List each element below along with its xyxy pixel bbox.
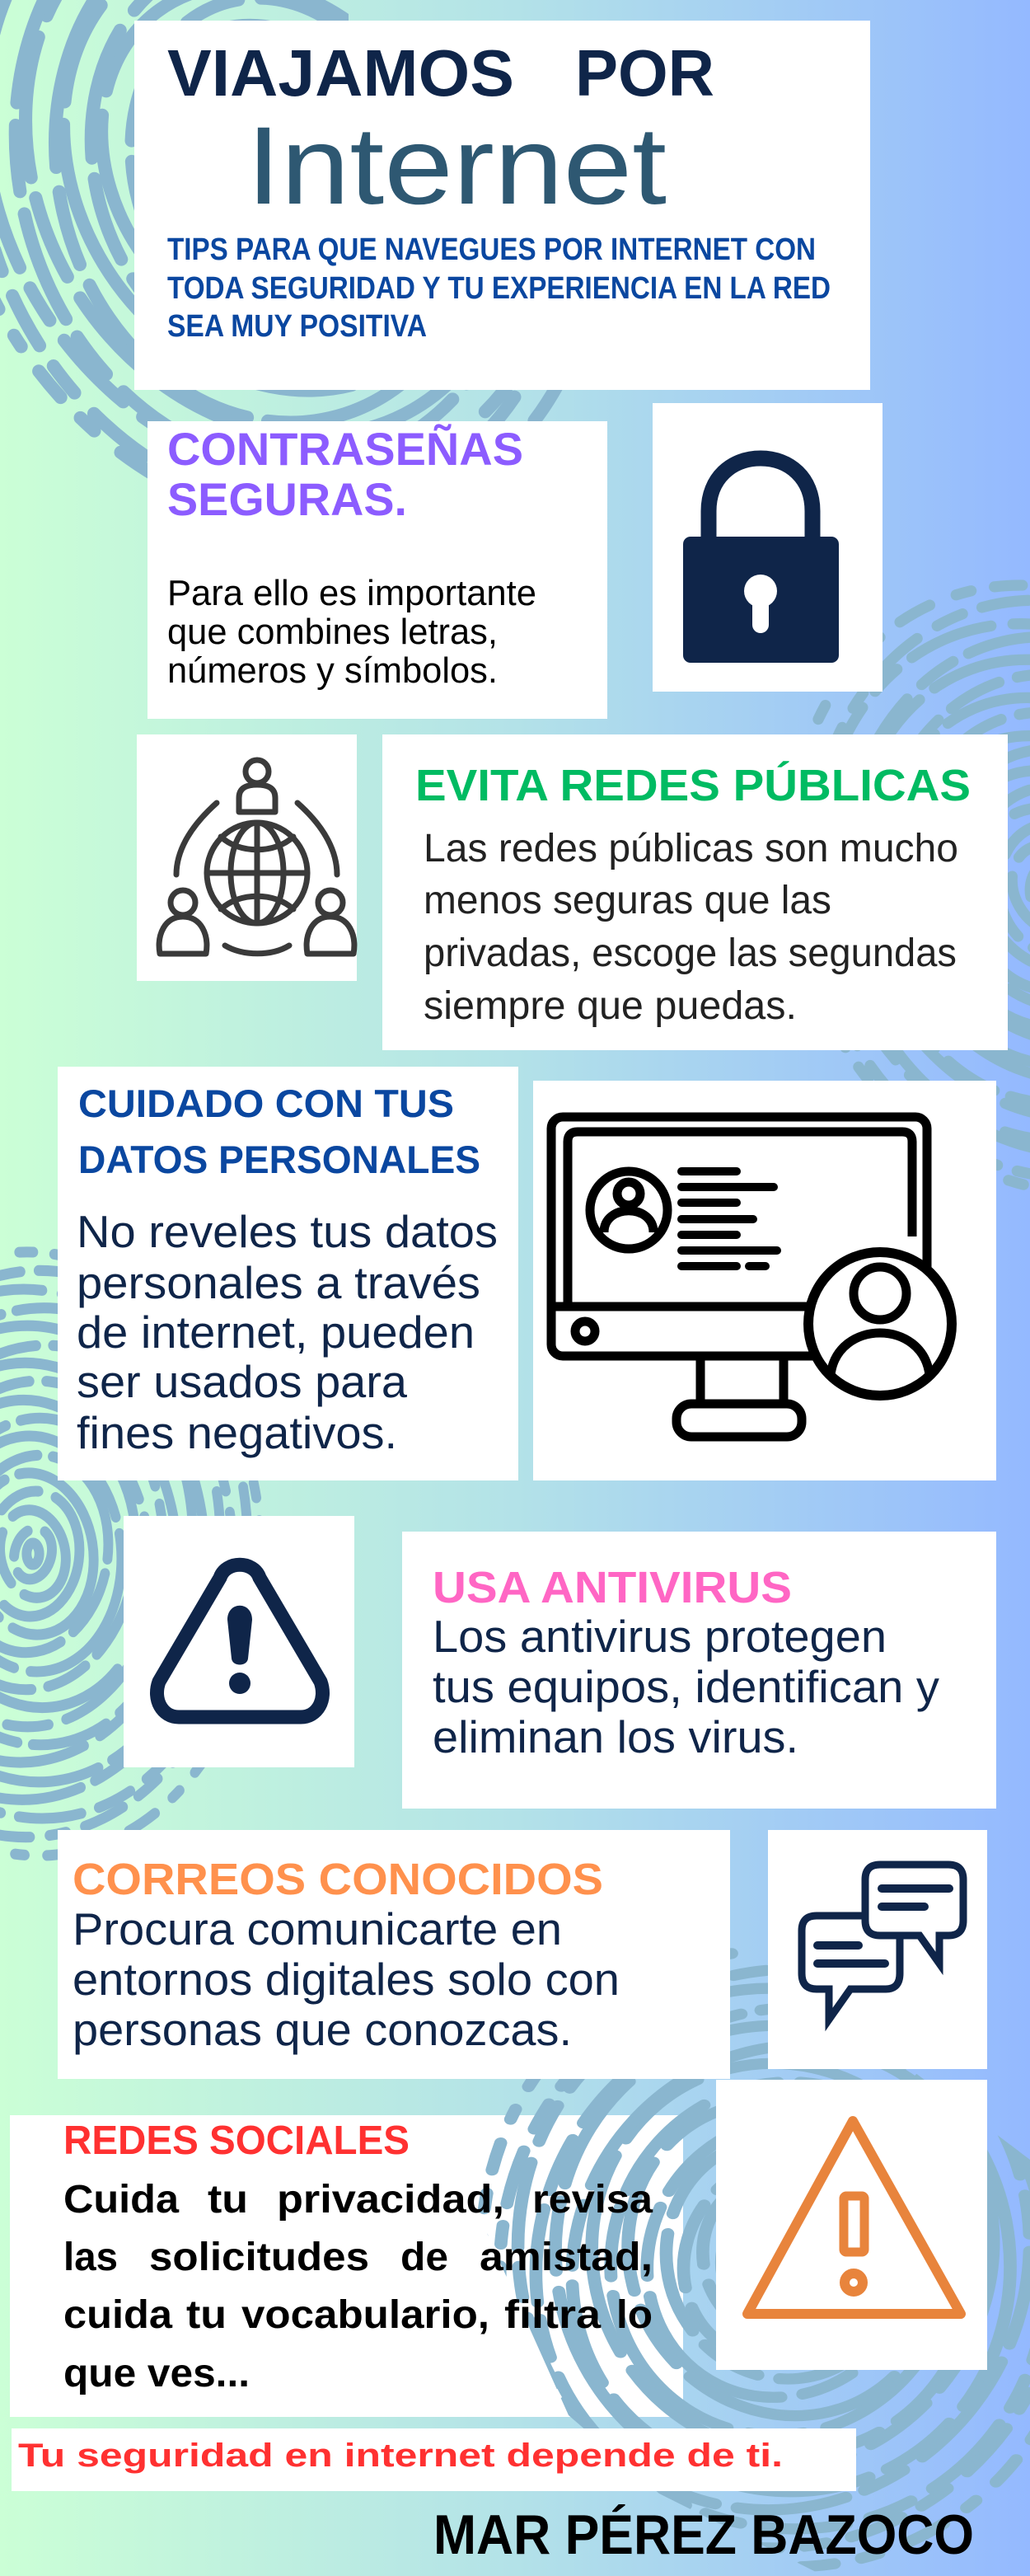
- heading: correos conocidos: CORREOS CONOCIDOS: [73, 1855, 603, 1904]
- panel: warning navy: [124, 1516, 354, 1767]
- body text: cuidado: ser usados para: [77, 1356, 407, 1407]
- body text: redes sociales: lo: [616, 2293, 653, 2337]
- body text: redes sociales: que ves...: [63, 2352, 250, 2395]
- body text: redes sociales: las: [63, 2236, 118, 2279]
- body text: redes sociales: cuida: [63, 2293, 172, 2337]
- fingerprint: top left: [0, 0, 562, 478]
- body text: correos: [73, 1903, 620, 2055]
- body text: redes sociales: filtra: [504, 2293, 601, 2337]
- body text: contraseñas: [167, 573, 536, 691]
- panel: monitor: [533, 1081, 996, 1480]
- body text: evita: menos seguras que las: [424, 879, 831, 922]
- fingerprint: bottom right: [457, 1933, 1030, 2576]
- body text: evita: privadas, escoge las segundas: [424, 931, 957, 975]
- icon: globe with people: [159, 760, 354, 954]
- icon: monitor with user profile: [551, 1117, 952, 1437]
- title: viajamos por: VIAJAMOS: [167, 36, 514, 110]
- body text: redes sociales: vocabulario,: [241, 2293, 489, 2337]
- subtitle: TODA SEGURIDAD Y TU EXPERIENCIA EN LA RED: [167, 271, 831, 306]
- icon: orange warning triangle: [747, 2121, 961, 2314]
- body text: redes sociales: [63, 2178, 653, 2395]
- body text: redes sociales: tu: [186, 2293, 227, 2337]
- subtitle: [167, 232, 831, 344]
- icon: chat bubbles: [802, 1865, 963, 2020]
- panel: lock: [653, 403, 883, 692]
- body text: redes sociales: tu: [208, 2178, 248, 2222]
- fingerprint: left middle: [0, 1235, 280, 1873]
- body text: contraseñas: Para ello es importante: [167, 573, 536, 613]
- panel: correos conocidos: [58, 1830, 730, 2079]
- body text: evita: [424, 827, 958, 1028]
- body text: contraseñas: números y símbolos.: [167, 650, 498, 691]
- heading: evita redes publicas: EVITA REDES PÚBLICAS: [415, 761, 971, 810]
- body text: evita: siempre que puedas.: [424, 984, 797, 1028]
- title: internet: Internet: [246, 105, 667, 228]
- heading: cuidado: DATOS PERSONALES: [78, 1138, 480, 1181]
- panel: cuidado datos personales: [58, 1067, 518, 1480]
- panel: chat: [768, 1830, 987, 2069]
- heading: contraseñas: CONTRASEÑAS: [167, 423, 523, 475]
- body text: antivirus: eliminan los virus.: [433, 1711, 798, 1762]
- heading: cuidado: CUIDADO CON TUS: [78, 1082, 454, 1125]
- panel: evita redes publicas: [382, 734, 1008, 1050]
- panel: globe people: [137, 734, 357, 981]
- title: viajamos por: [167, 36, 714, 110]
- body text: redes sociales: Cuida: [63, 2178, 179, 2222]
- panel: orange warning: [716, 2080, 987, 2370]
- heading: usa antivirus: USA ANTIVIRUS: [433, 1563, 792, 1612]
- body text: antivirus: [433, 1611, 939, 1762]
- body text: contraseñas: que combines letras,: [167, 612, 498, 652]
- author name: MAR PÉREZ BAZOCO: [433, 2503, 974, 2566]
- body text: antivirus: tus equipos, identifican y: [433, 1661, 939, 1712]
- body text: redes sociales: de: [400, 2236, 448, 2279]
- body text: correos: entornos digitales solo con: [73, 1954, 620, 2005]
- text: tu seguridad: Tu seguridad en internet depende de ti.: [18, 2438, 783, 2474]
- panel: usa antivirus: [402, 1532, 996, 1809]
- body text: antivirus: Los antivirus protegen: [433, 1611, 887, 1662]
- panel: closing message: [12, 2428, 856, 2491]
- body text: cuidado: No reveles tus datos: [77, 1206, 498, 1257]
- body text: correos: Procura comunicarte en: [73, 1903, 562, 1954]
- body text: redes sociales: privacidad,: [277, 2178, 504, 2222]
- panel: title: [134, 21, 870, 390]
- panel: redes sociales background: [10, 2115, 683, 2417]
- body text: redes sociales: solicitudes: [149, 2236, 369, 2279]
- body text: evita: Las redes públicas son mucho: [424, 827, 958, 870]
- subtitle: TIPS PARA QUE NAVEGUES POR INTERNET CON: [167, 232, 816, 267]
- body text: redes sociales: revisa: [532, 2178, 653, 2222]
- text: redes sociales: [63, 2119, 653, 2395]
- body text: correos: personas que conozcas.: [73, 2004, 572, 2055]
- icon: padlock: [683, 458, 839, 663]
- heading: contraseñas: SEGURAS.: [167, 473, 407, 525]
- body text: cuidado: [77, 1206, 498, 1458]
- heading: cuidado: [78, 1082, 480, 1181]
- title: viajamos por: POR: [575, 36, 714, 110]
- body text: cuidado: personales a través: [77, 1257, 480, 1308]
- body text: cuidado: de internet, pueden: [77, 1307, 475, 1358]
- icon: warning triangle: [157, 1565, 323, 1717]
- subtitle: SEA MUY POSITIVA: [167, 309, 427, 344]
- body text: redes sociales: amistad,: [480, 2236, 653, 2279]
- heading: redes sociales: REDES SOCIALES: [63, 2119, 410, 2163]
- body text: cuidado: fines negativos.: [77, 1407, 397, 1458]
- heading: contraseñas: [167, 423, 523, 525]
- fingerprint: right middle: [700, 503, 1030, 1274]
- panel: contraseñas seguras: [147, 421, 607, 719]
